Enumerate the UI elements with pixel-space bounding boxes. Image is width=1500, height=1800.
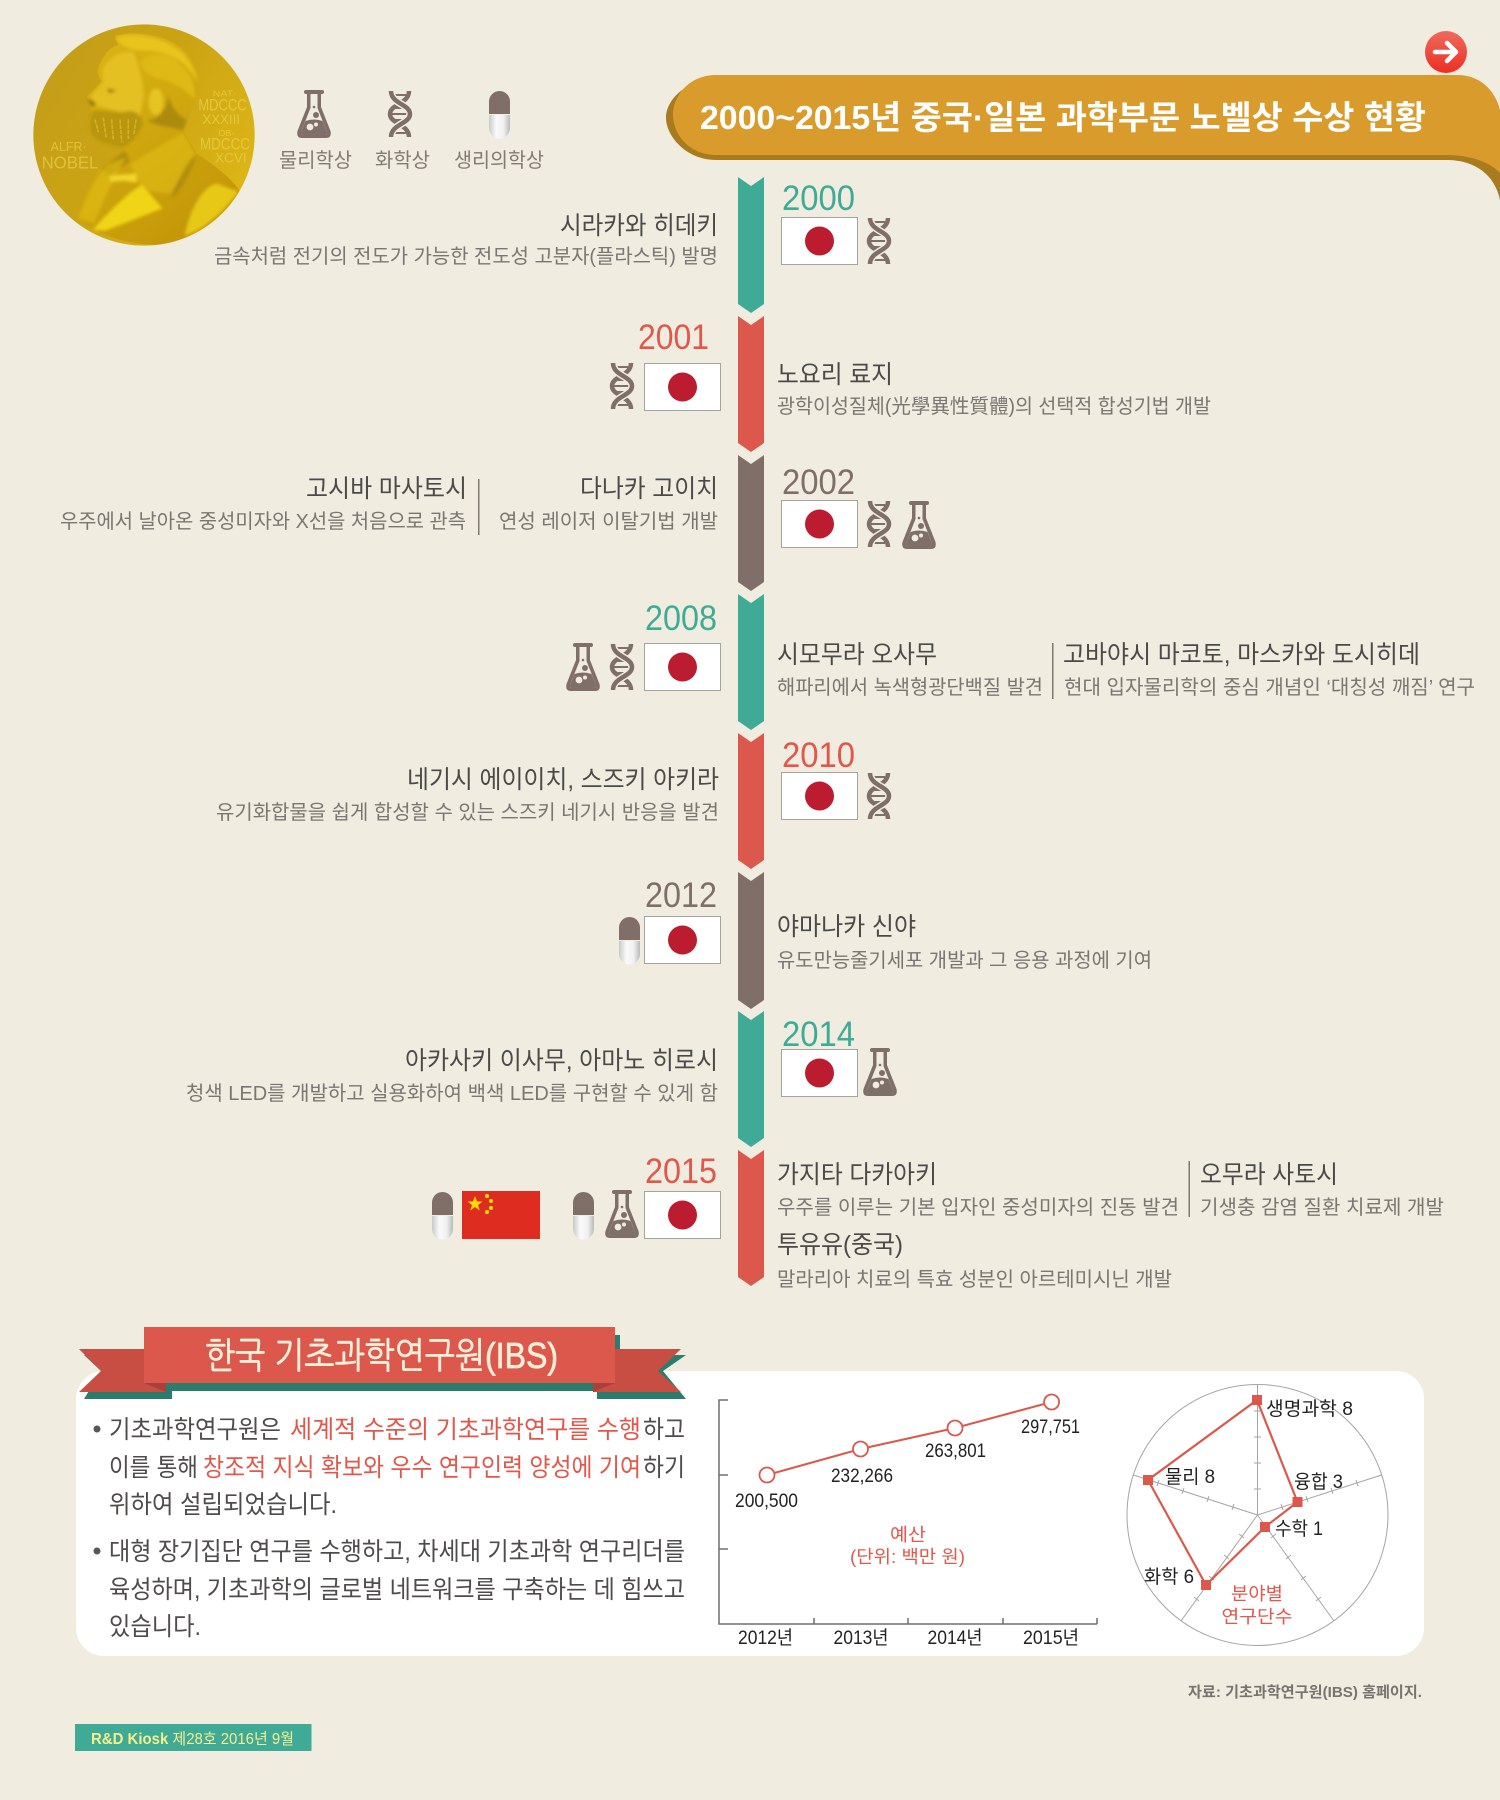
- bullet: [94, 1426, 100, 1432]
- row: 2002: [60, 463, 936, 549]
- flag: China: [462, 1191, 540, 1239]
- radar chart: research groups by field: 생명과학 8: [1266, 1398, 1353, 1420]
- line chart: budget: 200,500: [735, 1491, 798, 1512]
- line chart: budget: 297,751: [1021, 1417, 1080, 1438]
- year: 2014: [782, 1015, 855, 1054]
- laureate name: 다나카 고이치: [580, 475, 718, 503]
- achievement: 광학이성질체(光學異性質體)의 선택적 합성기법 개발: [777, 395, 1211, 418]
- laureate name: 아카사키 이사무, 아마노 히로시: [405, 1047, 718, 1075]
- icon: chemistry DNA: [390, 91, 410, 137]
- row: 2001: [612, 318, 1211, 418]
- icon: Nobel medal: XCVI: [215, 150, 247, 166]
- achievement: 현대 입자물리학의 중심 개념인 ‘대칭성 깨짐’ 연구: [1064, 676, 1475, 699]
- achievement: 해파리에서 녹색형광단백질 발견: [777, 676, 1043, 699]
- line chart: budget: 2013년: [834, 1627, 888, 1649]
- icon: Nobel medal: NAT·: [213, 90, 237, 99]
- icon: chemistry: [869, 501, 889, 547]
- icon: Nobel medal: ALFR·: [51, 139, 87, 154]
- row: 2015: [432, 1152, 1444, 1291]
- row: 2010: [216, 736, 889, 824]
- text block: IBS description: 창조적 지식 확보와 우수 연구인력 양성에 기여: [203, 1454, 641, 1482]
- icon: medicine pill: [489, 91, 510, 138]
- legend: prize categories: [279, 90, 544, 172]
- radar chart: research groups by field: 융합 3: [1294, 1471, 1343, 1493]
- icon: physics: [863, 1048, 897, 1096]
- icon: Nobel medal: [33, 24, 255, 246]
- icon: physics: [605, 1190, 639, 1238]
- radar chart: research groups by field: 수학 1: [1275, 1518, 1323, 1540]
- laureate name: 시모무라 오사무: [777, 641, 937, 669]
- year: 2002: [782, 463, 855, 502]
- achievement: 기생충 감염 질환 치료제 개발: [1200, 1196, 1444, 1219]
- flag: Japan: [782, 1050, 858, 1096]
- icon: physics: [566, 643, 600, 691]
- panel: IBS: [76, 1371, 1424, 1656]
- achievement: 말라리아 치료의 특효 성분인 아르테미시닌 개발: [777, 1268, 1172, 1291]
- line chart: budget: 2014년: [928, 1627, 982, 1649]
- laureate name: 네기시 에이이치, 스즈키 아키라: [407, 766, 719, 794]
- line chart: budget: 예산: [890, 1525, 926, 1545]
- text block: IBS description: 이를 통해: [109, 1454, 198, 1482]
- text block: IBS description: [94, 1416, 685, 1641]
- achievement: 금속처럼 전기의 전도가 가능한 전도성 고분자(플라스틱) 발명: [214, 245, 718, 268]
- year: 2010: [782, 736, 855, 775]
- footer badge: R&D Kiosk 제28호 2016년 9월: [91, 1730, 294, 1748]
- year: 2001: [638, 318, 709, 357]
- icon: medicine: [619, 917, 640, 964]
- title banner: [666, 75, 1500, 200]
- icon: Nobel medal: OB·: [218, 129, 234, 138]
- achievement: 유기화합물을 쉽게 합성할 수 있는 스즈키 네기시 반응을 발견: [216, 801, 719, 824]
- flag: Japan: [644, 1192, 720, 1238]
- bullet: [94, 1548, 100, 1554]
- flag: Japan: [644, 644, 720, 690]
- text block: IBS description: 있습니다.: [109, 1613, 201, 1641]
- year: 2008: [645, 599, 717, 638]
- icon: Nobel medal: MDCCC: [200, 134, 250, 153]
- icon: Nobel medal: NOBEL: [42, 152, 98, 172]
- line chart: budget: 263,801: [925, 1441, 986, 1462]
- laureate name: 고시바 마사토시: [306, 475, 467, 503]
- text block: IBS description: 세계적 수준의 기초과학연구를 수행: [290, 1416, 641, 1444]
- achievement: 우주를 이루는 기본 입자인 중성미자의 진동 발견: [777, 1196, 1179, 1219]
- icon: Nobel medal: XXXIII: [202, 111, 240, 127]
- divider: [1052, 643, 1054, 699]
- line chart: budget: 232,266: [831, 1466, 893, 1487]
- row: 2000: [214, 179, 889, 268]
- icon: physics: [902, 501, 936, 549]
- laureate name: 시라카와 히데키: [560, 212, 718, 240]
- radar chart: research groups by field: 연구단수: [1222, 1607, 1292, 1627]
- line chart: budget: 2015년: [1023, 1627, 1079, 1649]
- icon: chemistry: [612, 363, 632, 409]
- laureate name: 고바야시 마코토, 마스카와 도시히데: [1063, 641, 1420, 669]
- radar chart: research groups by field: 물리 8: [1165, 1466, 1215, 1488]
- laureate name: 노요리 료지: [777, 361, 893, 389]
- footer badge: [75, 1724, 312, 1751]
- achievement: 연성 레이저 이탈기법 개발: [499, 510, 718, 533]
- laureate name: 야마나카 신야: [777, 913, 916, 941]
- text block: IBS description: 위하여 설립되었습니다.: [109, 1491, 337, 1519]
- title: 2000~2015년 중국·일본 과학부문 노벨상 수상 현황: [700, 99, 1426, 136]
- line chart: budget: [719, 1394, 1097, 1649]
- achievement: 유도만능줄기세포 개발과 그 응용 과정에 기여: [777, 949, 1152, 972]
- row: 2014: [186, 1015, 897, 1105]
- ribbon title: 한국 기초과학연구원(IBS): [205, 1335, 558, 1376]
- achievement: 우주에서 날아온 중성미자와 X선을 처음으로 관측: [60, 510, 466, 533]
- icon: chemistry: [869, 218, 889, 264]
- year: 2000: [782, 179, 855, 218]
- radar chart: research groups by field: [1127, 1384, 1388, 1646]
- radar chart: research groups by field: 분야별: [1231, 1584, 1283, 1604]
- row: 2012: [619, 876, 1152, 972]
- row: 2008: [566, 599, 1475, 699]
- radar chart: research groups by field: 화학 6: [1144, 1566, 1194, 1588]
- text block: IBS description: 대형 장기집단 연구를 수행하고, 차세대 기초과학 연구리더를: [109, 1538, 685, 1566]
- year: 2012: [645, 876, 717, 915]
- icon: medicine: [573, 1192, 594, 1240]
- icon: physics flask: [297, 90, 331, 138]
- flag: Japan: [644, 364, 720, 410]
- icon: Nobel medal: MDCCC: [198, 96, 247, 115]
- line chart: budget: (단위: 백만 원): [850, 1547, 965, 1567]
- legend label: physics: 물리학상: [279, 149, 352, 172]
- laureate name: 오무라 사토시: [1200, 1161, 1338, 1189]
- flag: Japan: [782, 772, 858, 820]
- laureate name: 가지타 다카아키: [777, 1161, 937, 1189]
- text block: IBS description: 하고: [643, 1416, 685, 1444]
- laureate name: 투유유(중국): [777, 1231, 903, 1259]
- source note: 자료: 기초과학연구원(IBS) 홈페이지.: [1188, 1684, 1422, 1701]
- icon: medicine: [432, 1192, 453, 1240]
- ribbon heading: [79, 1327, 686, 1399]
- year: 2015: [645, 1152, 717, 1191]
- legend label: chemistry: 화학상: [375, 149, 430, 172]
- achievement: 청색 LED를 개발하고 실용화하여 백색 LED를 구현할 수 있게 함: [186, 1082, 718, 1105]
- legend label: medicine: 생리의학상: [454, 149, 544, 172]
- divider: [1188, 1161, 1190, 1217]
- divider: [478, 479, 480, 535]
- icon: chemistry: [612, 644, 632, 690]
- text block: IBS description: 하기: [643, 1454, 685, 1482]
- flag: Japan: [782, 500, 858, 548]
- text block: IBS description: 기초과학연구원은: [109, 1416, 281, 1444]
- flag: Japan: [644, 916, 720, 964]
- icon: chemistry: [869, 773, 889, 819]
- icon: red arrow button: [1425, 31, 1467, 73]
- timeline bar: [738, 177, 764, 1286]
- line chart: budget: 2012년: [738, 1627, 793, 1649]
- text block: IBS description: 육성하며, 기초과학의 글로벌 네트워크를 구축하는 데 힘쓰고: [109, 1576, 685, 1604]
- flag: Japan: [782, 218, 858, 264]
